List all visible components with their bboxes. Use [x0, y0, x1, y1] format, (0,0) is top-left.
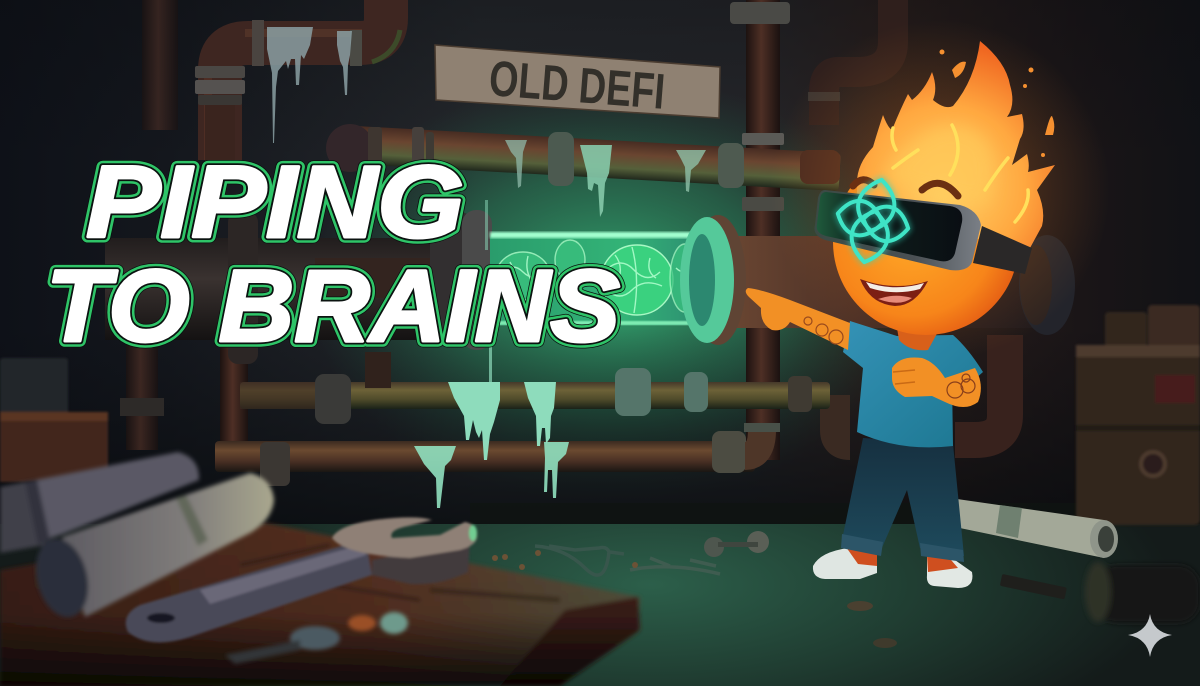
title: piping to brains: TO BRAINS	[46, 249, 620, 363]
wrench	[126, 517, 477, 642]
title: piping to brains: PIPING	[86, 145, 464, 259]
vr headset	[814, 190, 981, 270]
title: piping to brains: TO BRAINS	[46, 249, 620, 363]
title: piping to brains: PIPING	[86, 145, 464, 259]
big pipe and flange, left of glass tube	[105, 210, 492, 364]
upper and side pipes	[120, 0, 1005, 470]
lower pipes	[215, 352, 830, 486]
blue t-shirt	[843, 321, 983, 447]
neck	[897, 328, 940, 350]
arm across chest with hand and tattoo	[892, 357, 981, 407]
smile	[860, 279, 928, 306]
floor clutter: small tools	[492, 531, 1067, 648]
icon: sparkle watermark	[1128, 614, 1172, 657]
title: piping to brains: TO BRAINS	[46, 249, 620, 363]
rolled blueprint on floor	[955, 499, 1118, 558]
sign: old defi: OLD DEFI	[487, 50, 667, 120]
vr strap	[973, 226, 1032, 274]
title: piping to brains	[46, 145, 620, 363]
flame hair	[857, 41, 1055, 248]
tube right flange	[680, 215, 746, 345]
middle rusty pipe	[326, 124, 841, 191]
big pipe, right of glass tube	[730, 235, 1075, 335]
title: piping to brains: TO BRAINS	[46, 249, 620, 363]
shoes	[813, 545, 972, 588]
green slime drips	[267, 27, 706, 508]
scattered washers on table	[225, 612, 408, 664]
teal knot logo on visor	[829, 172, 917, 270]
head	[833, 149, 1019, 335]
jeans	[841, 438, 964, 562]
glowing glass tube with brains	[490, 232, 714, 325]
pointing arm with tattoo	[746, 288, 850, 350]
rolled paper plans	[0, 452, 274, 623]
wooden table	[0, 523, 640, 686]
background wall	[0, 0, 1200, 528]
crate and box, left	[0, 358, 108, 482]
eyebrows	[853, 180, 958, 196]
character: flame mascot with VR headset	[746, 20, 1110, 588]
title: piping to brains: PIPING	[86, 145, 464, 259]
barrel and containers, right	[1076, 305, 1200, 525]
title: piping to brains: PIPING	[86, 145, 464, 259]
floor	[0, 524, 1200, 686]
foreground tool, bottom right	[1085, 562, 1200, 623]
